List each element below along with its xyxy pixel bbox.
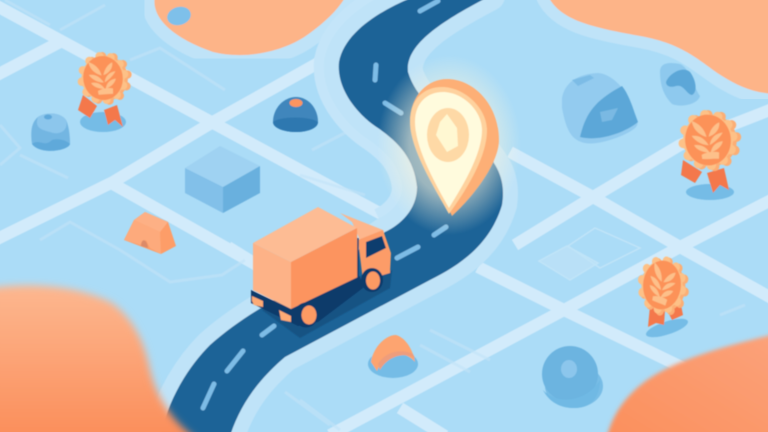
pin rim [410, 87, 487, 214]
map pin with glow [377, 55, 521, 235]
small blue rock building [660, 63, 700, 106]
dark blue dome with orange cap [273, 97, 318, 132]
award medal right [680, 111, 740, 200]
truck chassis [251, 276, 363, 326]
pin ring [427, 108, 469, 162]
pin face [415, 92, 482, 208]
pin back [410, 79, 499, 216]
award medal left [78, 52, 131, 132]
lane dashes [203, 1, 446, 408]
orange hut [124, 212, 176, 254]
award medal lower right [637, 256, 690, 341]
delivery truck [251, 207, 392, 338]
top orange hill [154, 0, 346, 55]
blue pebble [165, 4, 193, 28]
glow [377, 55, 521, 235]
faint parcel block [539, 228, 640, 280]
cab [340, 213, 391, 281]
large blue rock building [562, 73, 638, 143]
blurred foreground orange hill right [606, 334, 768, 432]
top right orange hill [548, 0, 768, 94]
blue sphere [542, 346, 603, 408]
headlights [252, 296, 263, 307]
blue cylinder building [31, 114, 70, 151]
blue block building [185, 146, 260, 213]
pin gem [436, 114, 458, 152]
wheels [294, 302, 318, 328]
cargo box [253, 207, 358, 309]
orange arc mound [368, 335, 418, 378]
winding road [160, 0, 503, 432]
blurred foreground orange hill left [0, 285, 198, 432]
road shadow under truck [262, 270, 392, 338]
